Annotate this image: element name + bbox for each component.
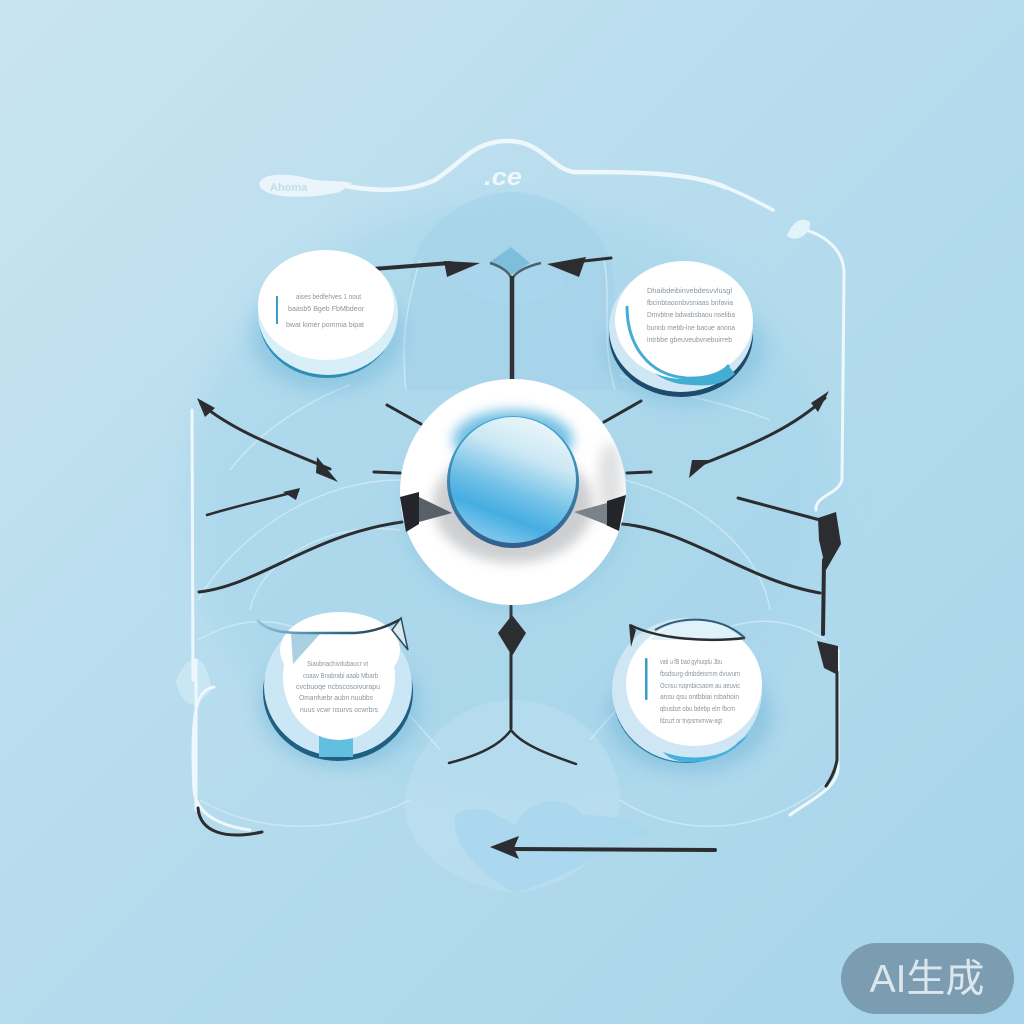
text block: Ocnsu ruqmbicsaom au aeuvic	[660, 681, 740, 690]
text block: coaav Bnabrabi aaab Mbarb	[303, 671, 378, 680]
top junction	[490, 247, 541, 406]
text block: fdzuzt or trvpsmvmvw-agt	[660, 716, 722, 725]
hub orb	[447, 416, 579, 548]
translucent water shapes	[176, 192, 835, 893]
arrow: right upper	[689, 391, 829, 478]
top-left label blob	[259, 175, 352, 197]
text block: nuus vcwr nsurvs ocwrbrs	[300, 705, 378, 714]
text block	[286, 292, 365, 329]
text block: Dmvbtne bdwabsbaou nseliba	[647, 310, 736, 319]
hub	[400, 379, 626, 610]
text block	[296, 659, 380, 714]
arrow: left upper	[197, 398, 338, 482]
text block	[660, 657, 740, 725]
badge: AI generated: AI生成	[870, 958, 984, 1001]
line: right lower from hub	[622, 524, 820, 593]
text block: fbsdsurg-dmbdeisrnm dvuvum	[660, 669, 740, 678]
hub right wedge	[574, 495, 626, 531]
arrow: top-left to top junction	[373, 261, 480, 277]
text block: cvcbuoqe ncbscosoivurapu	[296, 682, 380, 691]
bottom-left corner line	[198, 808, 262, 835]
right vertical connector	[817, 512, 841, 786]
white outer outline	[192, 141, 844, 830]
text block: qbusbzt obu bdebp elrr fbcm	[660, 704, 735, 713]
line: left lower to hub	[199, 522, 402, 592]
node: bottom-right	[608, 618, 772, 773]
text block: Omanfuebr aubn nuubbs	[299, 693, 373, 702]
node: top-right	[605, 261, 765, 405]
hub white ring	[400, 379, 626, 605]
arrow: left middle	[207, 488, 300, 515]
text block: fbcinbtaoonbvsniaas bnfavia	[647, 298, 734, 307]
text block: aises bedfehves 1 nout	[296, 292, 361, 301]
text block: Dhaibdeibinvebdesvvlusgl	[647, 286, 732, 295]
short radial ticks	[374, 401, 651, 473]
bottom arrow	[490, 836, 715, 859]
top-left label blob: Ahoma	[270, 182, 308, 194]
text block: vati u fB bad gyhuqdu Jbu	[660, 657, 722, 666]
arrows and connector lines	[197, 247, 841, 859]
hub left wedge	[400, 492, 452, 532]
badge: AI generated	[841, 943, 1014, 1014]
line: right upper to connector	[738, 498, 820, 520]
text block: bwat kimer pommia bipat	[286, 320, 364, 329]
top label mark: .ce	[484, 164, 522, 191]
text block: baasb5 Bgeb FbMbdeor	[288, 304, 365, 313]
node: bottom-left	[258, 612, 420, 767]
text block: ansu qsu ontbbiai rsbahoin	[660, 692, 739, 701]
bottom junction	[449, 604, 576, 764]
node: top-left	[252, 250, 404, 391]
text block: intrbbe gbeuveubvnebuirreb	[647, 335, 732, 344]
arrow: top-right to top junction	[547, 257, 611, 277]
text block: Siaubnachivdubaucr vt	[307, 659, 368, 668]
text block: bunnb mebb-lne bacue anona	[647, 323, 736, 332]
text block	[647, 286, 736, 344]
